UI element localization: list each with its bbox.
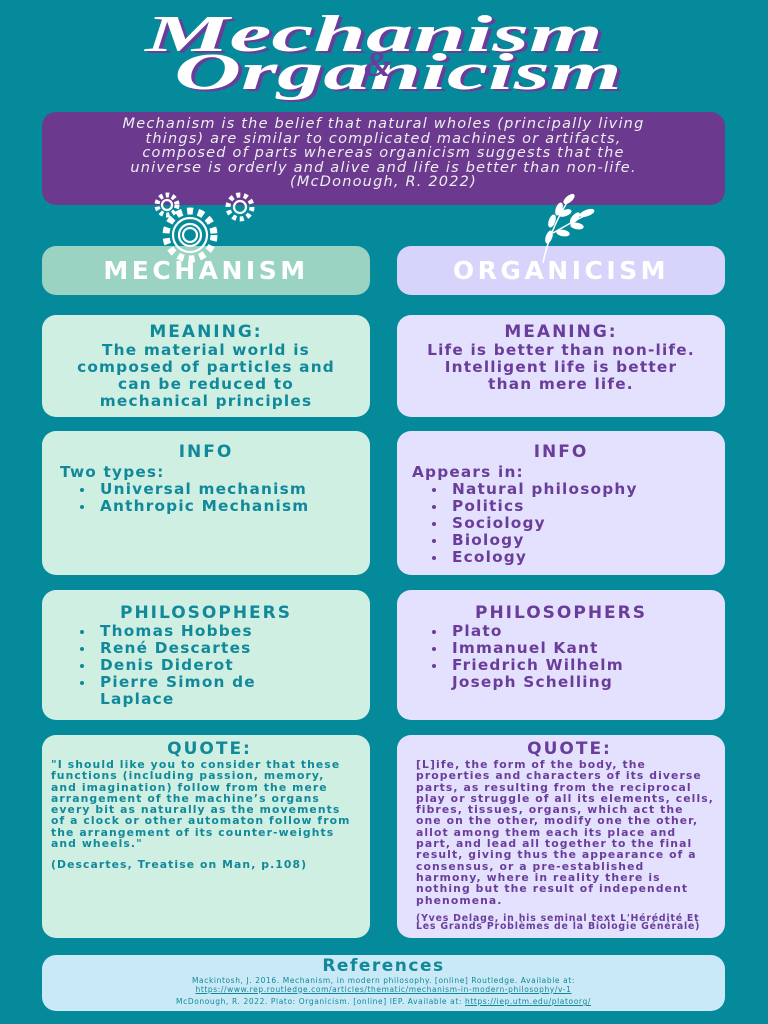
panel: mechanism quote: every bit as naturally as the movements [51, 803, 340, 816]
intro panel [42, 112, 725, 205]
panel: organicism philosophers [397, 590, 725, 720]
panel: mechanism info: INFO [179, 442, 233, 462]
panel: mechanism meaning: composed of particles and [77, 358, 335, 376]
panel: organicism quote: QUOTE: [527, 739, 612, 759]
panel: mechanism philosophers: Thomas Hobbes [100, 622, 253, 640]
panel: organicism quote: result, giving thus the appearance of a [416, 848, 697, 861]
icon: leaf branch [542, 194, 594, 263]
panel: references: https://www.rep.routledge.com/articles/thematic/mechanism-in-modern-philosophy/v-1 [195, 984, 572, 994]
panel: organicism info: Politics [452, 497, 525, 515]
panel: mechanism quote: (Descartes, Treatise on Man, p.108) [51, 858, 307, 871]
panel: mechanism philosophers: René Descartes [100, 639, 251, 657]
panel: mechanism quote: functions (including passion, memory, [51, 769, 324, 782]
panel: organicism quote: fibres, tissues, organs, which act the [416, 803, 684, 816]
panel: mechanism quote: and wheels." [51, 837, 143, 850]
header: organicism: ORGANICISM [453, 256, 669, 285]
panel: mechanism quote: "I should like you to consider that these [51, 758, 340, 771]
panel: references: McDonough, R. 2022. Plato: Organicism. [online] IEP. Available at: https://iep.utm.edu/platoorg/ [176, 997, 591, 1006]
panel: mechanism meaning: mechanical principles [100, 392, 312, 410]
panel: mechanism quote: of a clock or other automaton follow from [51, 814, 351, 827]
panel: mechanism meaning: MEANING: [149, 322, 263, 342]
panel: mechanism info: Two types: [60, 463, 165, 481]
panel: mechanism philosophers [42, 590, 370, 720]
title: Mechanism [145, 6, 603, 63]
panel: organicism info: INFO [534, 442, 588, 462]
panel: organicism info [397, 431, 725, 575]
panel: organicism info: Natural philosophy [452, 480, 638, 498]
panel: organicism quote: consensus, or a pre-established [416, 860, 644, 873]
panel: references: References [322, 956, 445, 976]
panel: organicism info: Biology [452, 531, 524, 549]
panel: organicism quote: one on the other, modify one the other, [416, 814, 698, 827]
panel: organicism meaning: than mere life. [488, 375, 634, 393]
panel: organicism quote: part, and lead all together to the final [416, 837, 692, 850]
panel: organicism philosophers: Joseph Schelling [452, 673, 613, 691]
panel: mechanism meaning [42, 315, 370, 417]
panel: mechanism philosophers: Denis Diderot [100, 656, 234, 674]
panel: mechanism quote: the arrangement of its counter-weights [51, 826, 334, 839]
title [144, 6, 622, 102]
panel: organicism quote: allot among them each its place and [416, 826, 676, 839]
header: mechanism [42, 246, 370, 295]
panel: mechanism quote: arrangement of the machine’s organs [51, 792, 320, 805]
panel: mechanism meaning: can be reduced to [118, 375, 294, 393]
panel: mechanism philosophers: Pierre Simon de [100, 673, 256, 691]
panel: mechanism philosophers: PHILOSOPHERS [120, 603, 292, 623]
intro panel: Mechanism is the belief that natural wholes (principally living [123, 116, 644, 132]
panel: organicism quote: parts, as resulting from the reciprocal [416, 781, 692, 794]
title: & [364, 44, 392, 84]
panel: organicism info: Ecology [452, 548, 527, 566]
panel: mechanism quote: and imagination) follow from the mere [51, 781, 328, 794]
panel: organicism meaning [397, 315, 725, 417]
panel: organicism quote: play or struggle of all its elements, cells, [416, 792, 714, 805]
panel: references: Mackintosh, J. 2016. Mechanism, in modern philosophy. [online] Routledge. Available at: [192, 976, 575, 985]
panel: organicism quote: Les Grands Problèmes de la Biologie Générale) [416, 921, 700, 932]
panel: organicism meaning: MEANING: [504, 322, 618, 342]
panel: mechanism info [42, 431, 370, 575]
panel: mechanism quote: QUOTE: [167, 739, 252, 759]
panel: organicism philosophers: Immanuel Kant [452, 639, 599, 657]
panel: organicism info: Sociology [452, 514, 546, 532]
intro panel: universe is orderly and alive and life is better than non-life. [130, 160, 637, 176]
panel: mechanism info: Universal mechanism [100, 480, 307, 498]
panel: organicism quote: harmony, where in reality there is [416, 871, 661, 884]
panel: organicism philosophers: Plato [452, 622, 503, 640]
panel: mechanism philosophers: Laplace [100, 690, 174, 708]
intro panel: things) are similar to complicated machines or artifacts, [145, 130, 622, 146]
panel: organicism info: Appears in: [412, 463, 524, 481]
intro panel: composed of parts whereas organicism suggests that the [142, 145, 625, 161]
header: mechanism: MECHANISM [103, 256, 309, 285]
panel: organicism quote: nothing but the result of independent [416, 882, 688, 895]
panel: organicism philosophers: Friedrich Wilhelm [452, 656, 624, 674]
panel: organicism quote: properties and characters of its diverse [416, 769, 702, 782]
panel: organicism meaning: Intelligent life is better [445, 358, 677, 376]
panel: organicism quote: phenomena. [416, 894, 502, 907]
panel: organicism philosophers: PHILOSOPHERS [475, 603, 647, 623]
title: Organicism [174, 44, 622, 101]
panel: mechanism quote [42, 735, 370, 938]
panel: organicism meaning: Life is better than non-life. [427, 341, 695, 359]
panel: organicism quote: (Yves Delage, in his seminal text L'Hérédité Et [416, 913, 699, 924]
intro panel: (McDonough, R. 2022) [290, 174, 477, 190]
panel: references [42, 955, 725, 1011]
panel: organicism quote [397, 735, 725, 938]
icon: gears [154, 192, 254, 262]
header: organicism [397, 246, 725, 295]
panel: organicism quote: [L]ife, the form of the body, the [416, 758, 646, 771]
panel: mechanism meaning: The material world is [102, 341, 310, 359]
panel: mechanism info: Anthropic Mechanism [100, 497, 309, 515]
